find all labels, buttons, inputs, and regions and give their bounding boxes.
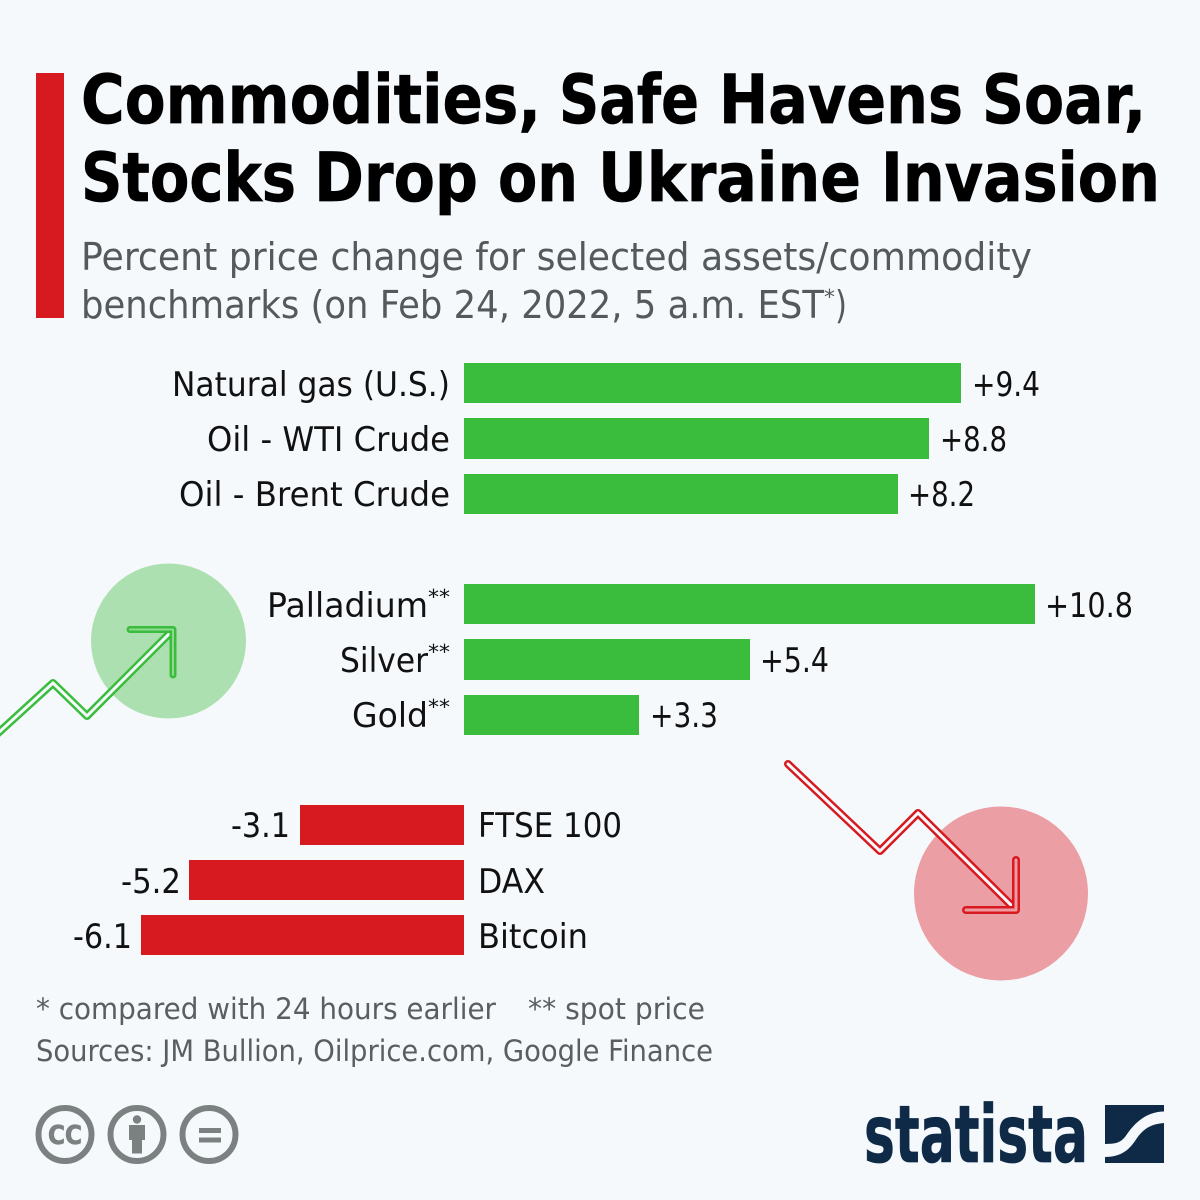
subtitle: ) <box>835 283 847 327</box>
row: bitcoin: -6.1 <box>73 917 132 957</box>
bar chart: stocks and bitcoin <box>73 805 622 957</box>
row: DAX <box>121 860 545 902</box>
icon: no derivatives <box>182 1108 236 1161</box>
subtitle <box>81 235 1032 327</box>
icon: attribution person <box>110 1108 164 1161</box>
row: DAX: DAX <box>478 862 545 902</box>
row: WTI crude: +8.8 <box>940 420 1007 460</box>
row: brent crude <box>179 474 975 515</box>
icon: statista mark <box>1105 1105 1164 1163</box>
icon: rising arrow with green circle <box>0 564 246 735</box>
row: WTI crude <box>207 418 1007 460</box>
row: FTSE 100 <box>231 805 622 846</box>
subtitle: * <box>824 285 835 309</box>
footnotes and sources: Sources: JM Bullion, Oilprice.com, Google Finance <box>36 1034 713 1068</box>
icon: falling arrow with red circle <box>788 764 1088 980</box>
row: palladium: +10.8 <box>1045 586 1133 626</box>
row: gold <box>352 695 718 736</box>
red accent bar <box>36 73 64 318</box>
row: silver: +5.4 <box>760 641 829 681</box>
subtitle: Percent price change for selected assets/commodity <box>81 235 1032 279</box>
row: brent crude: Oil - Brent Crude <box>179 475 450 515</box>
row: DAX: -5.2 <box>121 862 181 902</box>
row: WTI crude: Oil - WTI Crude <box>207 420 450 460</box>
title: Ukraine <box>598 139 861 218</box>
row: silver <box>340 639 829 681</box>
row: palladium <box>267 584 1133 626</box>
title: Drop <box>314 139 478 218</box>
title: on <box>498 139 578 218</box>
row: natural gas: +9.4 <box>972 365 1040 405</box>
icon: creative commons <box>38 1108 92 1161</box>
row: brent crude: +8.2 <box>908 475 975 515</box>
row: bitcoin <box>73 915 588 957</box>
statista logo: statista <box>864 1089 1088 1181</box>
license icons <box>38 1108 236 1161</box>
bar chart: precious metals <box>267 584 1133 736</box>
row: bitcoin: Bitcoin <box>478 917 588 957</box>
title: Soar, <box>982 61 1146 140</box>
title: Stocks <box>81 139 296 218</box>
row: FTSE 100: FTSE 100 <box>478 806 622 846</box>
title: Havens <box>719 61 963 140</box>
row: gold: ** <box>428 695 450 719</box>
row: palladium: ** <box>428 585 450 609</box>
bar chart: energy <box>172 363 1040 515</box>
icon: creative commons: CC <box>48 1121 82 1151</box>
title: Safe <box>559 61 699 140</box>
row: palladium: Palladium <box>267 586 428 626</box>
row: silver: ** <box>428 640 450 664</box>
footnotes and sources: ** spot price <box>528 992 705 1026</box>
row: gold: +3.3 <box>650 696 718 736</box>
footnotes and sources: * compared with 24 hours earlier <box>36 992 496 1026</box>
row: natural gas: Natural gas (U.S.) <box>172 365 450 405</box>
title: Commodities, <box>81 61 541 140</box>
title: Invasion <box>881 139 1160 218</box>
footnotes and sources <box>36 992 713 1068</box>
row: silver: Silver <box>340 641 428 681</box>
row: natural gas <box>172 363 1040 405</box>
subtitle: benchmarks (on Feb 24, 2022, 5 a.m. EST <box>81 283 825 327</box>
row: gold: Gold <box>352 696 428 736</box>
title <box>81 61 1160 218</box>
row: FTSE 100: -3.1 <box>231 806 290 846</box>
